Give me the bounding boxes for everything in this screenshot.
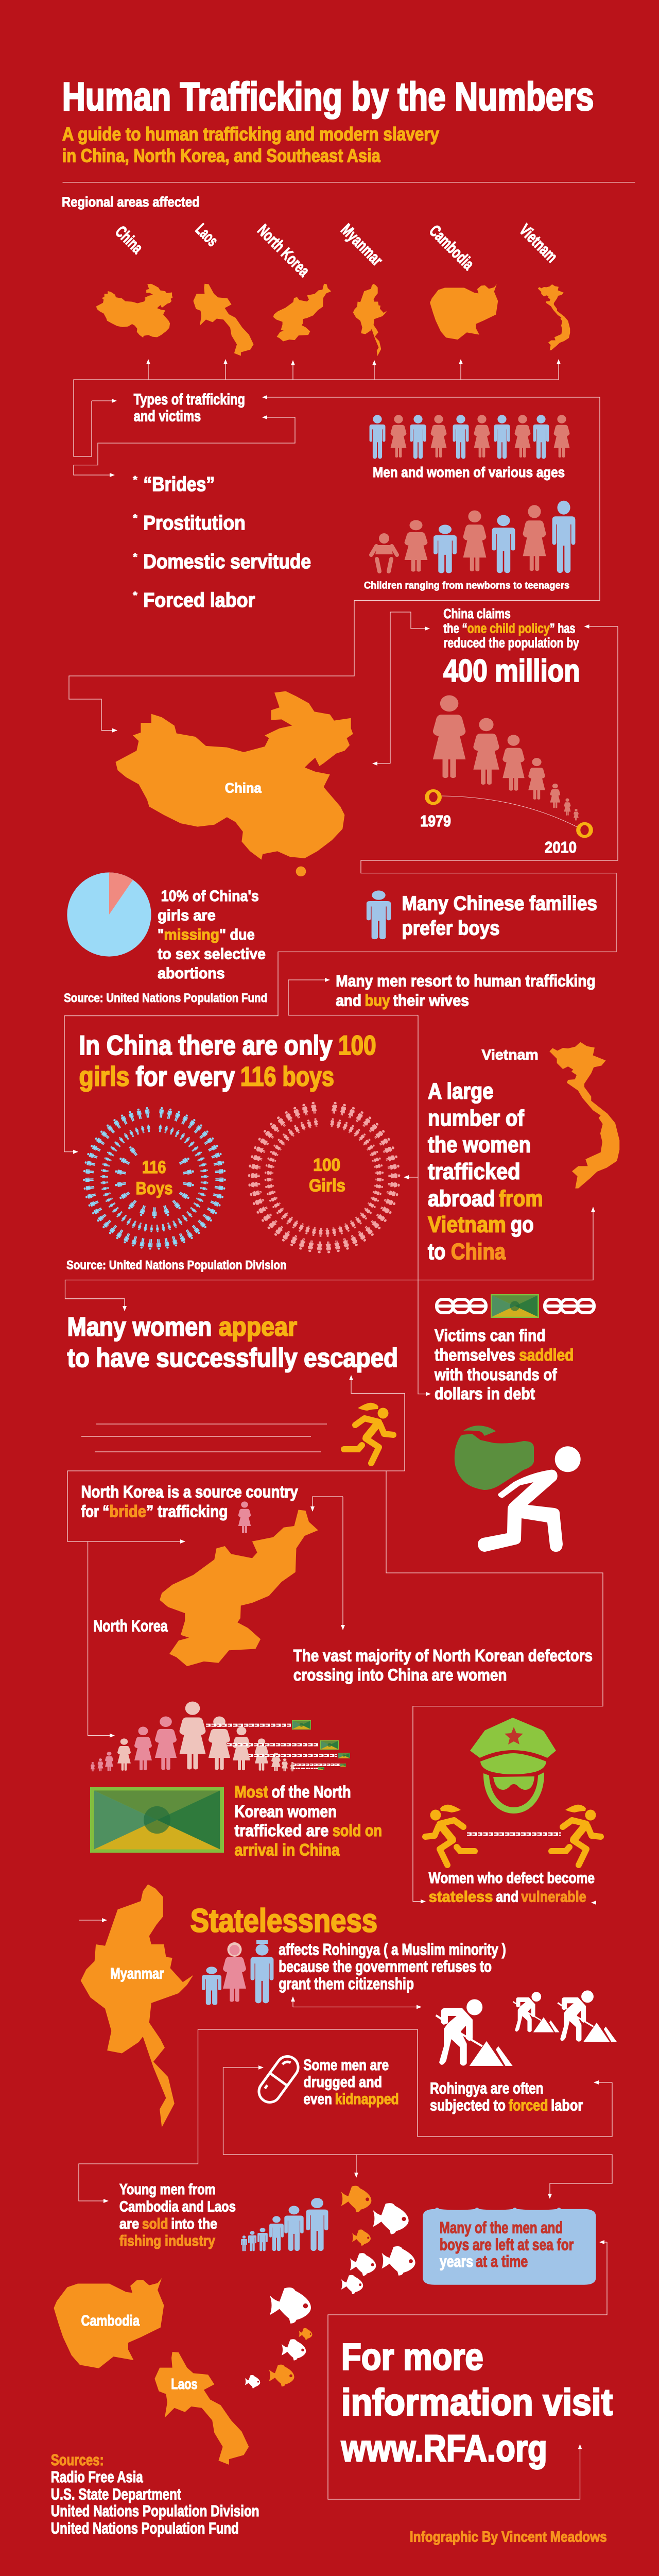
rotated country labels: Myanmar	[337, 220, 387, 269]
icon: boy	[367, 890, 391, 939]
icon: Rohingya family	[202, 1940, 273, 2005]
heading: appear to escape: appear	[218, 1312, 297, 1341]
bullet list: *	[133, 474, 137, 485]
label: 100 girls	[309, 1155, 345, 1195]
text: bride trafficking	[81, 1482, 298, 1521]
connector: wives to circle chart and debt text	[288, 980, 430, 1394]
map: Myanmar: Myanmar	[110, 1965, 164, 1982]
text: Vietnam trafficking: Vietnam	[428, 1212, 506, 1237]
heading: appear to escape: Many women	[67, 1312, 212, 1341]
map: small Laos	[193, 284, 253, 356]
icon: two runners chained	[425, 1805, 601, 1865]
map: Laos	[154, 2352, 249, 2465]
text: Vietnam trafficking: number of	[428, 1106, 524, 1131]
text: Vietnam trafficking	[428, 1078, 543, 1264]
bullet list: “Brides”	[143, 473, 215, 496]
bullet list	[133, 473, 311, 612]
text: missing girls: " due	[219, 926, 255, 943]
text: sold on arrival: Korean women	[234, 1802, 337, 1821]
text: drugged and kidnapped: drugged and	[303, 2073, 382, 2090]
text: Vietnam trafficking: to	[428, 1239, 445, 1264]
icon row: North Korean women with chains	[91, 1702, 350, 1771]
bullet list: *	[133, 551, 137, 563]
text: stateless and vulnerable: stateless	[429, 1888, 493, 1905]
icon: chained money	[436, 1294, 595, 1318]
label: 100 girls: Girls	[309, 1176, 345, 1195]
bullet list: *	[133, 513, 137, 524]
text: debt: with thousands of	[434, 1365, 557, 1384]
timeline arc	[442, 796, 577, 827]
rotated country labels: North Korea	[254, 221, 314, 280]
text: one child policy: one child policy	[467, 621, 550, 636]
text: sold on arrival: of the North	[271, 1782, 351, 1801]
text: fishing industry: Young men from	[119, 2181, 216, 2197]
timeline marker 2010: 2010	[545, 839, 577, 856]
text: drugged and kidnapped	[303, 2056, 399, 2107]
heading: ratio: for every	[136, 1062, 235, 1092]
panel: left at sea	[423, 2208, 596, 2285]
map: Vietnam: Vietnam	[481, 1046, 539, 1063]
map: small Cambodia	[430, 284, 498, 340]
text: buy wives: their wives	[393, 991, 469, 1010]
text: stateless and vulnerable: and	[496, 1888, 518, 1905]
map: Laos: Laos	[171, 2376, 198, 2392]
heading: types of trafficking: Types of trafficking	[134, 391, 245, 408]
map: North Korea	[93, 1510, 318, 1666]
text: missing girls: to sex selective	[158, 945, 266, 962]
icon row: shrinking population	[433, 696, 579, 821]
bullet list: Domestic servitude	[143, 550, 311, 573]
connector: escaped to defectors and soldier	[386, 1471, 603, 1902]
text: forced labor: labor	[551, 2097, 583, 2114]
map: Cambodia	[54, 2278, 164, 2368]
heading: appear to escape	[67, 1312, 398, 1372]
text: sold on arrival: Most	[234, 1782, 268, 1801]
icon row: men and boys	[241, 2198, 328, 2251]
subtitle: in China, North Korea, and Southeast Asia	[62, 145, 380, 166]
connector: drugged to fish and sea box	[223, 2067, 612, 2198]
heading: types of trafficking: and victims	[134, 408, 201, 425]
text: bride trafficking: for “	[81, 1502, 109, 1521]
text: sold on arrival: trafficked are	[234, 1821, 328, 1840]
text: buy wives	[336, 972, 596, 1010]
call to action: For more	[341, 2336, 483, 2378]
text: drugged and kidnapped: Some men are	[303, 2056, 389, 2073]
map: small China	[96, 284, 172, 337]
connector: North Korea map to defectors text	[313, 1497, 343, 1630]
icon row: men and women	[370, 415, 569, 459]
pictogram: 116 boys rings	[67, 1093, 241, 1265]
heading: regional areas: Regional areas affected	[62, 195, 200, 210]
icon: school of fish	[245, 2186, 415, 2388]
text: Rohingya	[279, 1940, 506, 1993]
subtitle	[62, 124, 439, 166]
heading: ratio: 116 boys	[240, 1062, 334, 1092]
rotated country labels: Cambodia	[426, 221, 478, 274]
map: small Vietnam	[538, 284, 570, 350]
bullet list: *	[133, 590, 137, 601]
icon: bride	[238, 1501, 251, 1533]
text: Vietnam trafficking: A large	[428, 1078, 493, 1104]
map: Myanmar	[81, 1884, 193, 2127]
timeline marker 1979	[420, 791, 451, 830]
heading: types of trafficking	[134, 391, 245, 425]
pie chart: missing girls	[67, 872, 151, 957]
text: fishing industry	[119, 2181, 236, 2249]
sources: Radio Free Asia	[51, 2468, 143, 2486]
bullet list: Prostitution	[143, 512, 246, 534]
text: fishing industry: into the	[171, 2215, 217, 2232]
text: fishing industry: Cambodia and Laos	[119, 2198, 236, 2215]
bullet list: Forced labor	[143, 589, 255, 612]
heading: ratio: 100	[338, 1030, 376, 1061]
map: China	[115, 691, 353, 876]
text: sold on arrival	[234, 1782, 382, 1859]
connector: victims panel to China map	[69, 397, 600, 731]
panel: left at sea: at a time	[476, 2253, 528, 2270]
text: fishing industry: fishing industry	[119, 2232, 215, 2249]
map: North Korea: North Korea	[93, 1617, 168, 1635]
icon: soldier	[470, 1718, 556, 1814]
sources	[51, 2452, 259, 2537]
section: bullets, one child policy and China map	[115, 464, 591, 876]
sources: Sources:	[51, 2452, 104, 2469]
heading: appear to escape: to have successfully escaped	[67, 1343, 398, 1372]
text: prefer boys	[402, 892, 597, 939]
text: missing girls	[158, 887, 266, 981]
source: population division: Source: United Nations Population Division	[66, 1258, 287, 1272]
text: Vietnam trafficking: from	[499, 1186, 543, 1211]
map: small North Korea	[273, 284, 331, 342]
text: debt: Victims can find	[435, 1326, 546, 1345]
icon row: children	[371, 501, 575, 573]
text: defectors: crossing into China are women	[293, 1665, 507, 1684]
connector: China map to one child policy	[373, 612, 429, 764]
map: Cambodia: Cambodia	[81, 2312, 140, 2329]
text: Vietnam trafficking: abroad	[428, 1186, 495, 1211]
heading: ratio: In China there are only	[79, 1030, 333, 1061]
rotated country labels: China	[112, 222, 147, 257]
panel: left at sea: years	[440, 2253, 473, 2270]
text: bride trafficking: ” trafficking	[146, 1502, 228, 1521]
section: header and regional maps	[62, 74, 594, 425]
text: Vietnam trafficking: the women	[428, 1132, 531, 1157]
text: one child policy	[443, 607, 579, 650]
sources: U.S. State Department	[51, 2486, 181, 2503]
pictogram: 100 girls rings	[228, 1082, 422, 1275]
text: bride trafficking: bride	[109, 1502, 146, 1521]
heading: ratio: girls	[79, 1062, 129, 1092]
sources: United Nations Population Division	[51, 2503, 259, 2520]
text: Rohingya: grant them citizenship	[279, 1975, 414, 1993]
text: debt: themselves	[435, 1345, 515, 1364]
section: preference, ratio and Vietnam	[64, 887, 619, 1272]
text: stateless and vulnerable: vulnerable	[521, 1888, 586, 1905]
section: escape and North Korea	[67, 1312, 593, 1684]
text: one child policy: China claims	[443, 607, 511, 621]
sources: United Nations Population Fund	[51, 2520, 239, 2537]
text: drugged and kidnapped: kidnapped	[335, 2091, 399, 2107]
connector: top distribution to countries	[74, 360, 559, 456]
source: population fund: Source: United Nations Population Fund	[64, 991, 267, 1005]
text: Vietnam trafficking: trafficked	[428, 1159, 521, 1184]
icon: sold on arrival money	[90, 1787, 224, 1853]
heading: statelessness: Statelessness	[190, 1903, 377, 1939]
text: one child policy: ” has	[550, 621, 576, 636]
icon: workers	[436, 1990, 617, 2066]
text: forced labor: Rohingya are often	[430, 2080, 543, 2097]
text: bride trafficking: North Korea is a source country	[81, 1482, 298, 1501]
timeline marker 1979: 1979	[420, 812, 451, 830]
heading: ratio	[79, 1030, 376, 1092]
text: sold on arrival: arrival in China	[234, 1840, 340, 1859]
connector: Rohingya text to workers	[293, 1997, 421, 2007]
text: Vietnam trafficking: go	[511, 1212, 534, 1237]
connector: runner to North Korea	[67, 1376, 405, 1736]
text: defectors	[293, 1646, 593, 1684]
call to action	[341, 2336, 613, 2469]
section: statelessness and Myanmar	[81, 1782, 595, 2127]
connector: one child policy to boy preference and pie	[64, 626, 618, 1152]
text: missing girls: girls are	[158, 907, 216, 924]
connector: Vietnam to escaped	[65, 1208, 593, 1311]
rotated country labels	[112, 220, 561, 280]
connector: types of trafficking to bullet list	[74, 417, 295, 475]
section: fishing and footer	[51, 2181, 613, 2545]
rotated country labels: Vietnam	[516, 221, 561, 266]
connector: sea box to more information	[328, 2242, 607, 2499]
text: missing girls: abortions	[158, 964, 225, 981]
text: fishing industry: are	[119, 2215, 139, 2232]
timeline marker 2010	[545, 824, 591, 856]
icon: pill	[255, 2052, 302, 2107]
text: missing girls: missing	[164, 926, 219, 943]
rotated country labels: Laos	[192, 220, 222, 250]
label: 116 boys: 116	[142, 1157, 166, 1177]
icon: man carrying bag	[455, 1426, 581, 1552]
motion lines	[81, 1424, 327, 1452]
text: missing girls: "	[158, 926, 164, 943]
label: 116 boys	[136, 1157, 172, 1198]
label: 100 girls: 100	[313, 1155, 340, 1175]
text: debt: saddled	[519, 1345, 574, 1364]
text: debt	[434, 1326, 574, 1403]
text: drugged and kidnapped: even	[303, 2091, 332, 2107]
label: 116 boys: Boys	[136, 1178, 172, 1198]
text: debt: dollars in debt	[435, 1384, 535, 1403]
text: one child policy: the “	[443, 621, 467, 636]
connector: stub arrows	[79, 1903, 595, 1920]
text: Vietnam trafficking: China	[451, 1239, 506, 1264]
map: small Myanmar	[353, 284, 387, 356]
connector: forced labor to young men	[79, 2029, 612, 2201]
text: buy wives: and	[336, 991, 361, 1010]
text: stateless and vulnerable	[429, 1869, 595, 1905]
map: Vietnam	[481, 1042, 619, 1189]
text: buy wives: buy	[365, 991, 390, 1010]
text: prefer boys: prefer boys	[402, 917, 500, 939]
text: forced labor: subjected to	[430, 2097, 506, 2114]
text: fishing industry: sold	[142, 2215, 168, 2232]
text: forced labor	[430, 2080, 583, 2114]
text: sold on arrival: sold on	[333, 1821, 382, 1840]
text: forced labor: forced	[509, 2097, 548, 2114]
text: missing girls: 10% of China's	[161, 887, 259, 904]
icon: yellow runner	[344, 1403, 393, 1463]
map: China: China	[225, 781, 262, 796]
